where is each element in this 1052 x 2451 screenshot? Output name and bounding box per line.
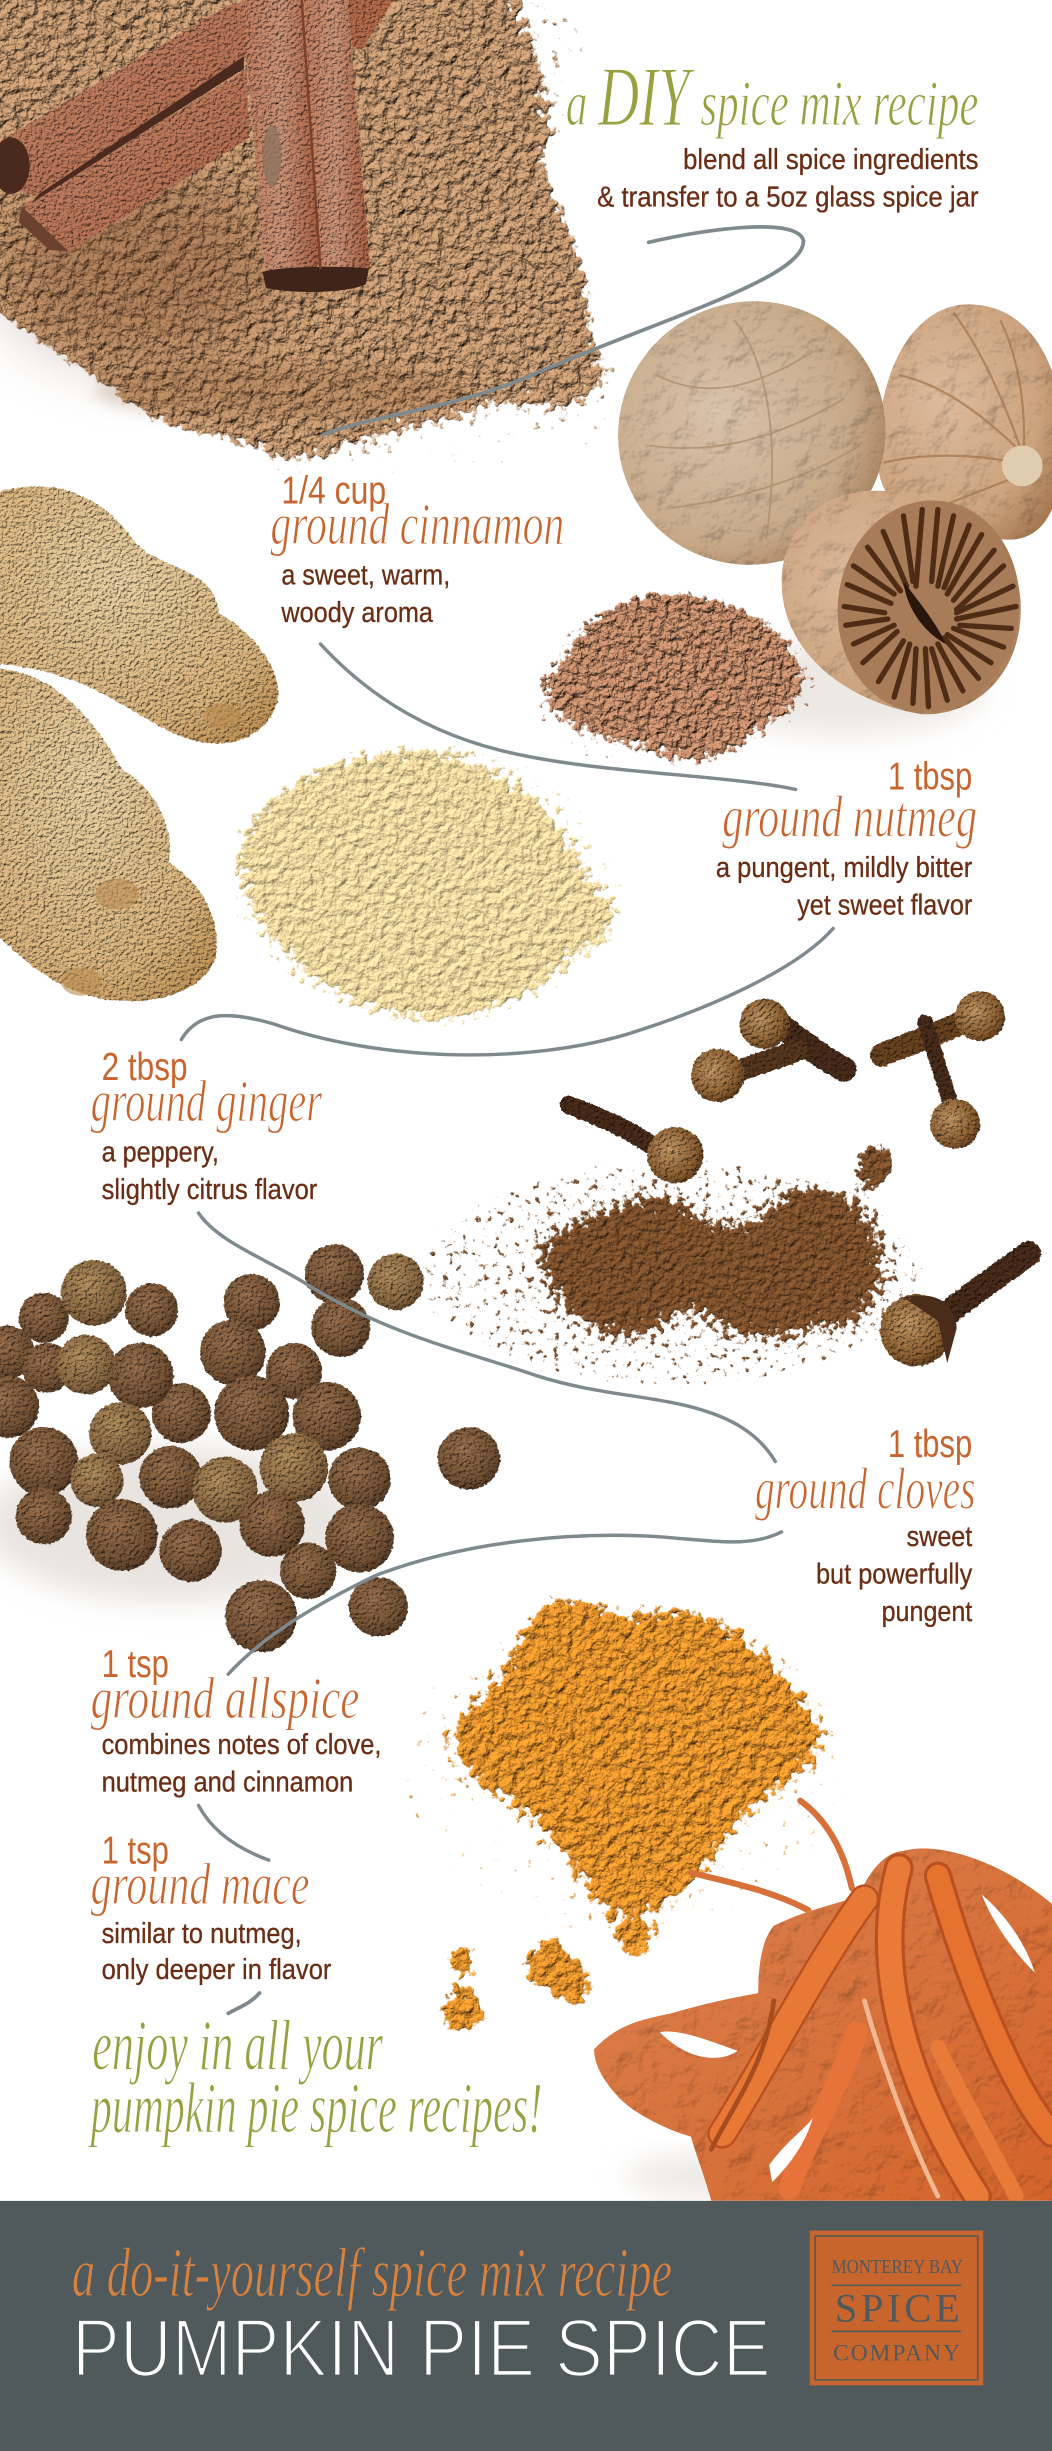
- nutmeg back right: [878, 304, 1052, 540]
- cinnamon description: woody aroma: [280, 597, 434, 629]
- mace description: [102, 1918, 332, 1986]
- allspice shadow: [0, 1446, 360, 1602]
- logo name bottom: COMPANY: [833, 2340, 960, 2366]
- ginger name: ground ginger: [91, 1068, 323, 1134]
- logo: Monterey Bay Spice Company: [810, 2231, 983, 2385]
- nutmeg ridges: [883, 313, 1024, 516]
- nutmeg halved: [782, 491, 1021, 714]
- allspice description: [102, 1729, 381, 1798]
- ginger amount: 2 tbsp: [102, 1046, 188, 1089]
- image: ginger root: [0, 486, 278, 1001]
- allspice cluster: [0, 1244, 500, 1652]
- clove stems: [569, 1016, 1029, 1316]
- image: ground ginger pile: [214, 727, 636, 1039]
- connector line: nutmeg to ginger: [181, 929, 833, 1055]
- logo rule bottom: [832, 2331, 961, 2332]
- connector line: cinnamon to nutmeg: [320, 644, 796, 789]
- text block: cloves: [755, 1423, 975, 1628]
- clove heads: [647, 991, 1005, 1366]
- footer title: PUMPKIN PIE SPICE: [72, 2303, 771, 2394]
- ginger upper lobe: [0, 486, 278, 744]
- nutmeg description: a pungent, mildly bitter: [716, 852, 973, 884]
- cinnamon description: a sweet, warm,: [281, 560, 450, 592]
- cloves description: but powerfully: [816, 1558, 973, 1590]
- ground nutmeg: [508, 589, 836, 785]
- mace strands: [711, 1868, 1052, 2196]
- cloves description: sweet: [907, 1521, 972, 1553]
- closing line two: pumpkin pie spice recipes!: [88, 2068, 542, 2148]
- nutmeg cut face: [824, 489, 1033, 724]
- footer background: [0, 2201, 1052, 2451]
- connector line: mace to closing: [228, 1993, 259, 2013]
- closing line one: enjoy in all your: [92, 2006, 384, 2086]
- mace loose threads: [691, 1801, 852, 1910]
- text block: mace: [91, 1829, 332, 1986]
- text block: cinnamon: [270, 469, 564, 629]
- footer subtitle: a do-it-yourself spice mix recipe: [72, 2234, 672, 2312]
- mace description: similar to nutmeg,: [102, 1918, 302, 1950]
- allspice name: ground allspice: [91, 1665, 360, 1731]
- cinnamon sticks: [0, 0, 399, 280]
- image: whole cloves: [569, 991, 1029, 1366]
- ginger description: a peppery,: [102, 1136, 219, 1168]
- connector line: cloves to allspice: [228, 1532, 782, 1674]
- nutmeg description: yet sweet flavor: [797, 889, 973, 921]
- image: ground cloves: [406, 1140, 938, 1399]
- clove sepal: [903, 1295, 957, 1363]
- cinnamon shading: [0, 172, 469, 419]
- cinnamon description: [280, 560, 450, 629]
- logo name middle: SPICE: [835, 2285, 960, 2330]
- ginger nodes: [61, 703, 241, 996]
- nutmeg shadow: [703, 641, 985, 735]
- ginger lower lobe: [0, 669, 217, 1001]
- image: ground mace pile: [383, 1587, 868, 2038]
- nutmeg amount: 1 tbsp: [888, 755, 972, 798]
- stick end caps: [0, 0, 369, 292]
- text block: ginger: [91, 1046, 323, 1206]
- footer banner: [0, 2201, 1052, 2451]
- allspice description: combines notes of clove,: [102, 1729, 381, 1761]
- cinnamon powder: [0, 0, 641, 508]
- ginger description: [102, 1136, 318, 1206]
- connector line: allspice to mace: [199, 1805, 269, 1860]
- cloves description: [816, 1521, 973, 1628]
- image: whole nutmeg: [508, 257, 1052, 785]
- nutmeg large: [575, 257, 929, 609]
- nutmeg germ spot: [1002, 445, 1043, 486]
- intro line one: blend all spice ingredients: [683, 144, 979, 176]
- text block: nutmeg: [716, 755, 977, 921]
- mace description: only deeper in flavor: [102, 1954, 332, 1986]
- nutmeg description: [716, 852, 973, 921]
- cloves description: pungent: [882, 1596, 972, 1628]
- image: whole mace blades: [594, 1801, 1052, 2201]
- connector line: ginger to cloves: [199, 1213, 775, 1462]
- mace amount: 1 tsp: [102, 1829, 169, 1872]
- text block: allspice: [91, 1643, 381, 1798]
- nutmeg wrinkles: [649, 320, 860, 539]
- allspice amount: 1 tsp: [102, 1643, 169, 1686]
- intro line two: & transfer to a 5oz glass spice jar: [597, 181, 979, 213]
- text block: recipe intro: [566, 51, 979, 213]
- cinnamon amount: 1/4 cup: [281, 469, 386, 512]
- logo rule top: [832, 2285, 961, 2286]
- closing message: [88, 2006, 542, 2148]
- allspice description: nutmeg and cinnamon: [102, 1766, 353, 1798]
- image: allspice berries: [0, 1244, 500, 1652]
- mace body: [594, 1848, 1052, 2201]
- logo inner border: [815, 2236, 978, 2380]
- mace shadow: [625, 2154, 844, 2198]
- cloves amount: 1 tbsp: [888, 1423, 972, 1466]
- mace gaps: [660, 1895, 1035, 2182]
- mace name: ground mace: [91, 1851, 310, 1917]
- image: ground cinnamon pile with sticks: [0, 0, 641, 508]
- logo box: [810, 2231, 983, 2385]
- ginger description: slightly citrus flavor: [102, 1174, 318, 1206]
- cinnamon name: ground cinnamon: [270, 491, 564, 557]
- logo name top: MONTEREY BAY: [832, 2256, 963, 2278]
- connector line: title to cinnamon: [324, 227, 803, 435]
